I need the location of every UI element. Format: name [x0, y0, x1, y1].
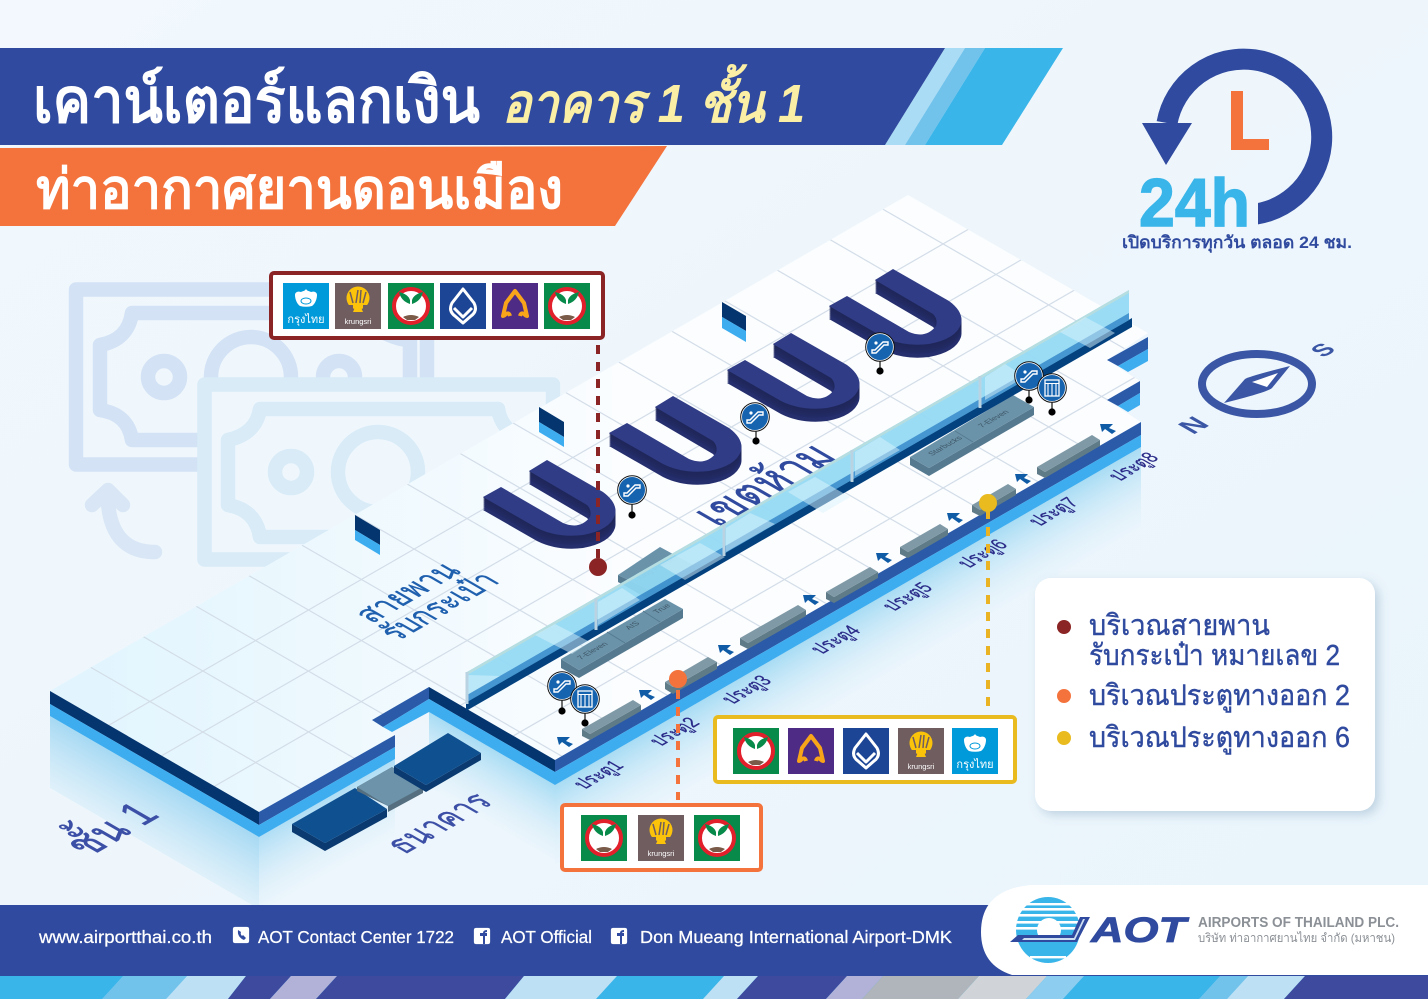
belt 1 — [483, 460, 616, 549]
shops behind glass — [618, 547, 695, 600]
callout: baggage belt banks — [271, 273, 603, 338]
shops: Starbucks, 7-Eleven: 7-Eleven — [976, 409, 1011, 429]
gate labels: ประตู4 — [805, 622, 867, 658]
flag marker — [355, 515, 380, 555]
gate labels: ประตู7 — [1023, 494, 1085, 530]
AOT logo panel: บริษัท ท่าอากาศยานไทย จำกัด (มหาชน) — [1198, 931, 1395, 945]
shops: 7-Eleven, AIS, True — [561, 599, 683, 678]
legend panel: บริเวณสายพาน — [1089, 610, 1270, 642]
subtitle band: ท่าอากาศยานดอนเมือง — [36, 158, 563, 220]
wall: left — [50, 716, 259, 909]
callout: exit 2 banks: krungsri — [648, 849, 675, 858]
callout: exit 2 banks — [562, 805, 761, 870]
gate labels: ประตู2 — [644, 714, 706, 750]
bottom stripes — [0, 976, 1428, 999]
compass: S — [1305, 339, 1342, 361]
shops behind glass: King Power — [634, 556, 677, 581]
glass barrier — [466, 290, 1132, 711]
AOT logo panel: AOT — [1090, 911, 1189, 950]
label: floor 1: ชั้น 1 — [46, 791, 169, 863]
dashed leader: yellow — [979, 494, 997, 712]
gate labels: ประตู6 — [952, 536, 1014, 572]
legend panel: บริเวณประตูทางออก 2 — [1089, 680, 1350, 713]
wall: middle — [259, 759, 395, 912]
gate labels — [568, 449, 1165, 793]
floor surface — [50, 195, 1148, 812]
dashed leader: red — [589, 345, 607, 576]
wall: front — [555, 447, 1141, 865]
title band — [0, 48, 945, 145]
callout: exit 6 banks — [715, 717, 1015, 782]
label: baggage belt — [346, 557, 508, 646]
footer band: www.airportthai.co.th — [38, 927, 212, 947]
footer band: Don Mueang International Airport-DMK — [640, 927, 952, 947]
callout: exit 6 banks: กรุงไทย — [956, 758, 994, 771]
edge bands — [50, 337, 1148, 837]
bank counter blocks — [292, 733, 481, 851]
gate labels: ประตู3 — [716, 672, 778, 708]
label: baggage belt: รับกระเป๋า — [371, 567, 508, 646]
footer band — [0, 905, 1428, 976]
callout: baggage belt banks: กรุงไทย — [287, 313, 325, 326]
footer band: AOT Official — [501, 927, 592, 947]
header stripes — [885, 48, 1063, 145]
flag marker — [539, 407, 564, 447]
shops: Starbucks, 7-Eleven — [910, 395, 1034, 476]
flag marker — [722, 302, 746, 342]
callout: baggage belt banks: krungsri — [345, 317, 372, 326]
legend panel — [1035, 578, 1375, 811]
title band: อาคาร 1 ชั้น 1 — [502, 63, 805, 134]
dashed leader: orange — [669, 670, 687, 800]
shops: 7-Eleven, AIS, True: 7-Eleven — [575, 641, 610, 661]
escalator pins — [548, 333, 1066, 727]
belt 2 — [609, 396, 742, 485]
shops: Starbucks, 7-Eleven: Starbucks — [926, 435, 964, 457]
belt 4 — [829, 269, 962, 358]
watermark: banknotes icon — [76, 290, 553, 560]
gate counters — [582, 435, 1100, 740]
label: baggage belt: สายพาน — [346, 557, 469, 628]
gate labels: ประตู5 — [877, 579, 939, 615]
24h icon: 24h — [1139, 165, 1250, 241]
floor plan — [50, 195, 1148, 905]
footer band: AOT Contact Center 1722 — [258, 927, 454, 947]
gate labels: ประตู8 — [1103, 449, 1165, 485]
shops: 7-Eleven, AIS, True: True — [651, 602, 673, 615]
callout: exit 6 banks: krungsri — [908, 762, 935, 771]
24h icon — [1122, 59, 1352, 253]
gate arrows — [557, 424, 1116, 747]
legend panel: บริเวณประตูทางออก 6 — [1089, 722, 1350, 755]
gate labels: ประตู1 — [568, 757, 630, 793]
compass — [1171, 339, 1342, 438]
label: restricted zone: เขตห้าม — [679, 435, 849, 534]
AOT logo panel — [981, 885, 1428, 975]
baggage belt U shapes — [483, 269, 962, 549]
24h icon: เปิดบริการทุกวัน ตลอด 24 ชม. — [1122, 233, 1352, 253]
shops: 7-Eleven, AIS, True: AIS — [623, 620, 642, 631]
legend panel: รับกระเป๋า หมายเลข 2 — [1089, 640, 1340, 672]
subtitle band — [0, 146, 667, 226]
compass: N — [1171, 412, 1216, 438]
AOT logo panel: AIRPORTS OF THAILAND PLC. — [1198, 915, 1399, 931]
wall: notch — [429, 712, 555, 860]
label: banks: ธนาคาร — [375, 786, 501, 859]
belt 3 — [727, 333, 860, 422]
title band: เคาน์เตอร์แลกเงิน — [33, 66, 480, 136]
